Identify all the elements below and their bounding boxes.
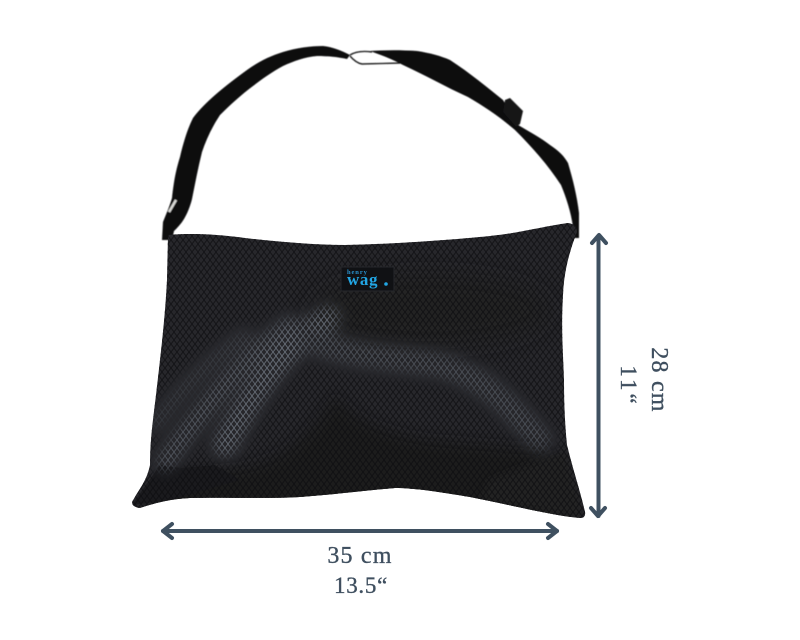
strap: left section <box>162 46 350 240</box>
width arrow <box>163 524 557 538</box>
strap: elastic loop <box>350 51 400 64</box>
bag body <box>132 223 586 518</box>
brand label <box>341 267 394 291</box>
width label: inches: 13.5“ <box>334 573 388 598</box>
height arrow <box>591 235 606 516</box>
strap: metal ring <box>169 200 176 212</box>
width label: centimetres: 35 cm <box>327 543 393 569</box>
strap: adjuster buckle <box>503 98 523 127</box>
height label: centimetres: 28 cm <box>646 347 672 413</box>
light reflections on mesh <box>150 298 558 478</box>
height label: inches: 11“ <box>616 365 641 407</box>
diamond mesh texture <box>132 223 586 518</box>
strap: right section <box>370 50 579 238</box>
brand: henry: henry <box>347 269 368 276</box>
brand: registered mark <box>384 282 388 286</box>
bottom hem <box>132 465 224 505</box>
fabric shading <box>130 275 585 520</box>
bag fabric <box>132 223 586 518</box>
brand: wag: wag <box>347 270 378 289</box>
shoulder strap <box>162 46 579 240</box>
